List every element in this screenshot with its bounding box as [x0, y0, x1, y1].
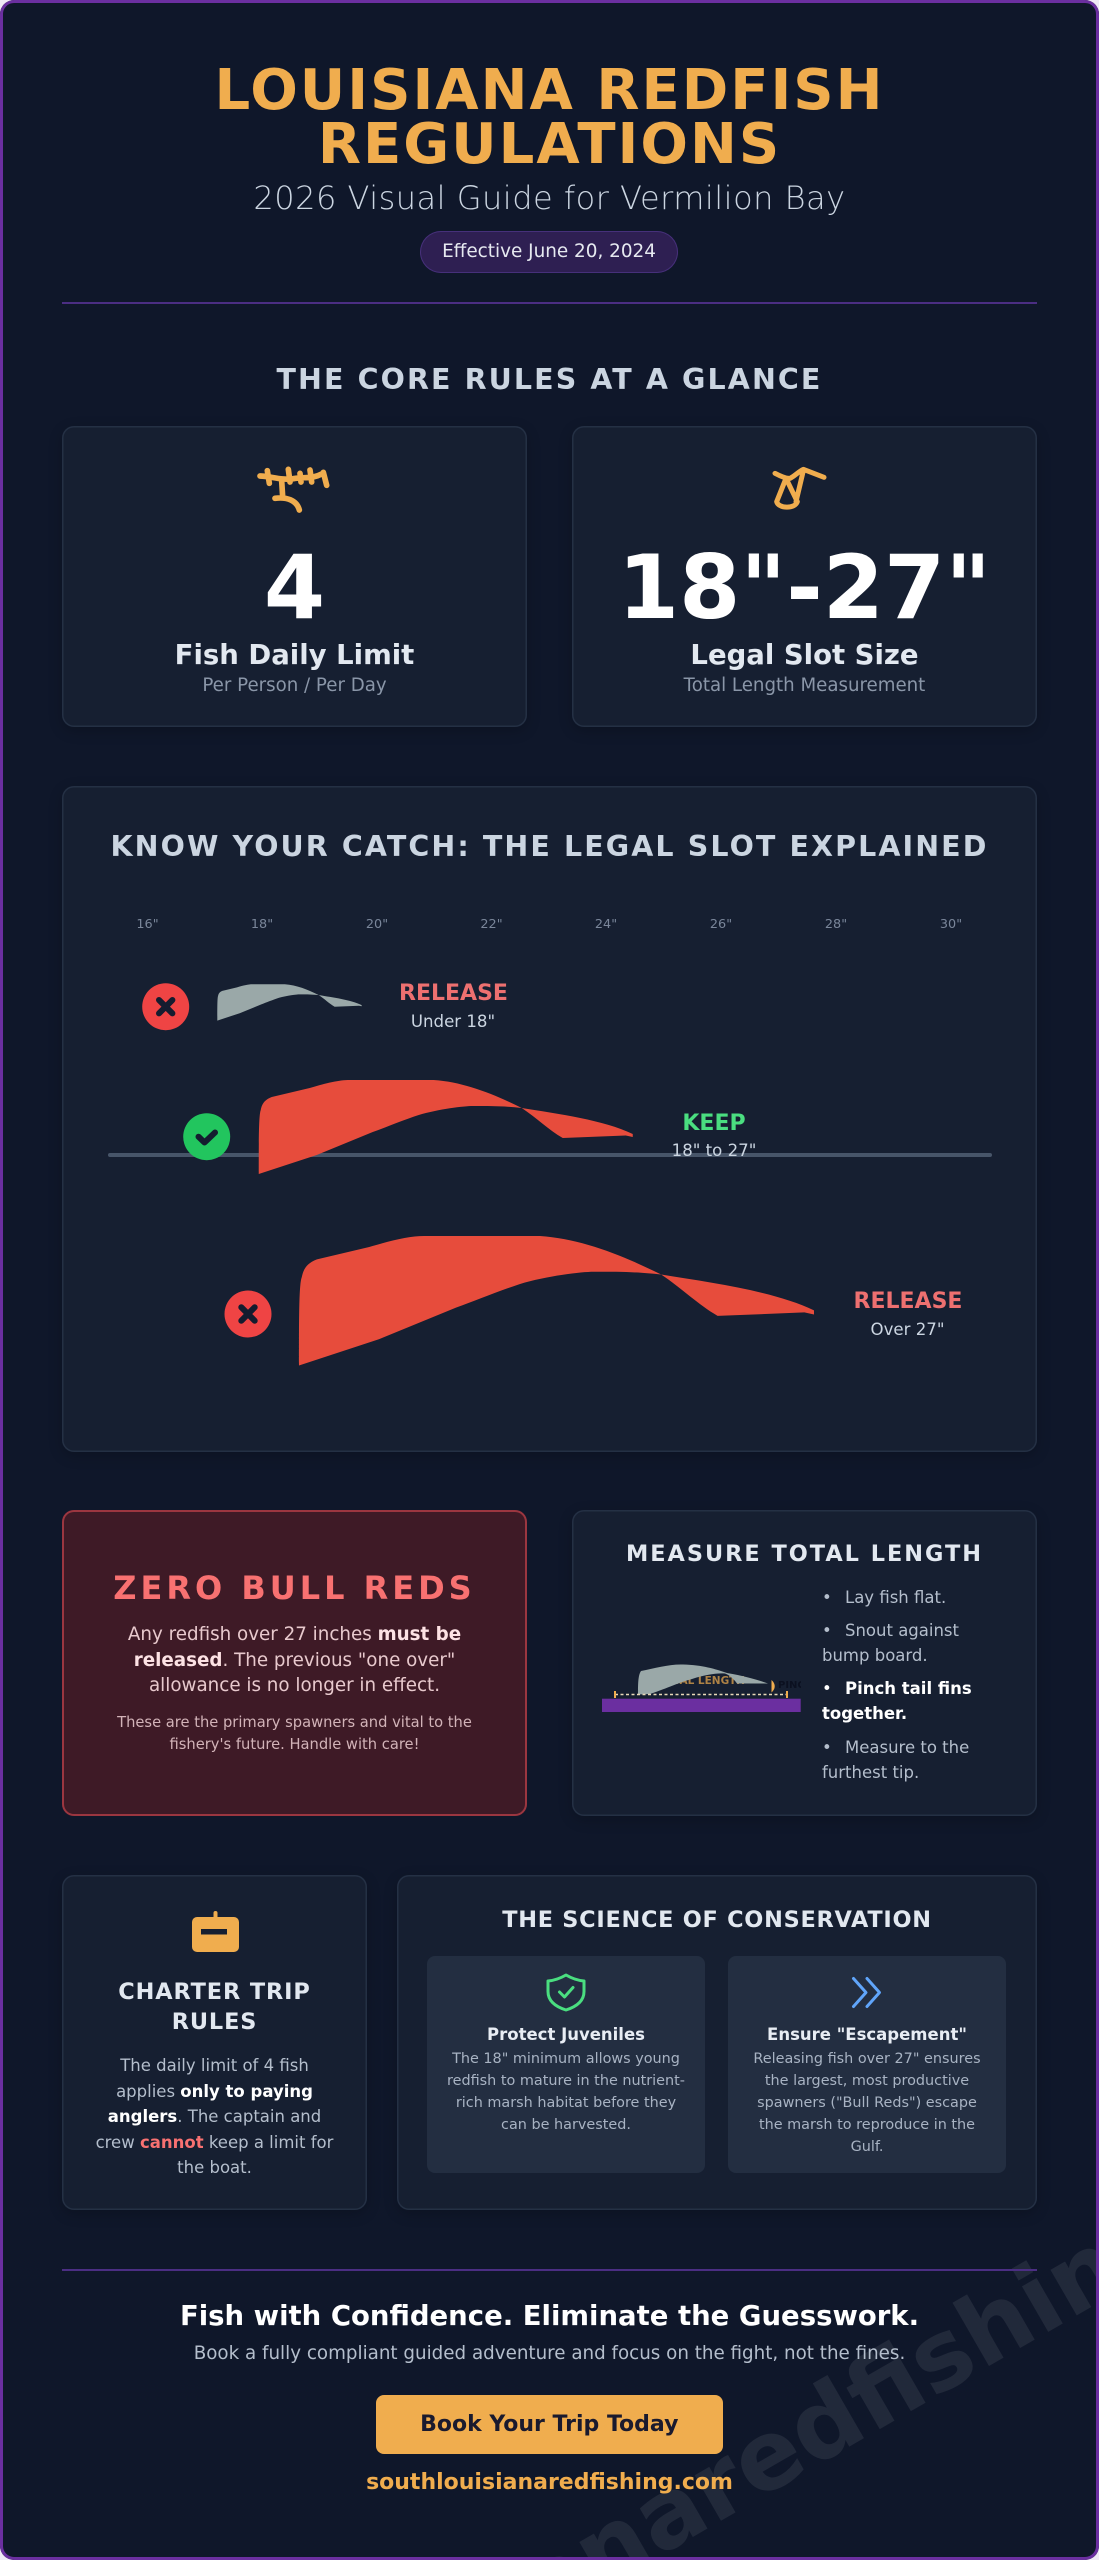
text: [753, 2051, 981, 2155]
measuring diagram: TOTAL LENGTH: [657, 1675, 745, 1687]
text: spawners ("Bull Reds") escape: [757, 2095, 977, 2111]
panel: fish daily limit: [62, 426, 527, 727]
fish and status icon: [142, 983, 362, 1030]
icon: shield check: [546, 1974, 586, 2012]
label: Legal Slot Size: [690, 639, 919, 671]
instruction list: •: [822, 1738, 832, 1757]
icon: chevrons: [852, 1976, 881, 2008]
heading: THE SCIENCE OF CONSERVATION: [502, 1907, 932, 1933]
ruler tick labels: 18": [251, 917, 273, 932]
instruction list: Pinch tail fins: [845, 1679, 972, 1698]
title: Ensure "Escapement": [767, 2025, 967, 2044]
title: [215, 58, 884, 177]
ruler tick labels: 20": [366, 917, 388, 932]
main text: Any redfish over 27 inches must be: [128, 1624, 461, 1645]
text: can be harvested.: [501, 2117, 631, 2133]
instruction list: •: [822, 1679, 832, 1698]
instruction list: Snout against: [845, 1621, 959, 1640]
instruction list: Lay fish flat.: [845, 1588, 946, 1607]
main text: allowance is no longer in effect.: [149, 1675, 440, 1696]
website link: southlouisianaredfishing.com: [366, 2470, 733, 2495]
body text: the boat.: [177, 2158, 252, 2177]
body text: crew cannot keep a limit for: [96, 2133, 333, 2152]
sub label: Total Length Measurement: [684, 674, 925, 696]
instruction list: •: [822, 1621, 832, 1640]
text: the marsh to reproduce in the: [759, 2117, 975, 2133]
small text: fishery's future. Handle with care!: [170, 1736, 419, 1753]
ruler tick labels: 26": [710, 917, 732, 932]
big number 4: 4: [264, 536, 325, 639]
section heading: core rules: THE CORE RULES AT A GLANCE: [277, 363, 822, 396]
heading: CHARTER TRIP: [118, 1979, 311, 2005]
main text: released. The previous "one over": [134, 1650, 455, 1671]
instruction list: together.: [822, 1704, 907, 1723]
small text: [117, 1714, 472, 1753]
icon: fish stringer: [257, 466, 330, 513]
body text: The daily limit of 4 fish: [120, 2056, 309, 2075]
sub label: Per Person / Per Day: [202, 674, 387, 696]
fish and status icon: [183, 1080, 633, 1174]
heading: ZERO BULL REDS: [113, 1569, 476, 1607]
body text: anglers. The captain and: [108, 2107, 321, 2126]
fish and status icon: [224, 1236, 814, 1366]
ruler tick labels: [136, 917, 962, 932]
icon: briefcase: [192, 1911, 239, 1952]
closing subtext: Book a fully compliant guided adventure and focus on the fight, not the fines.: [194, 2343, 905, 2364]
panel: science of conservation: [397, 1875, 1037, 2210]
small text: These are the primary spawners and vital to the: [117, 1714, 472, 1731]
small fish: release: [142, 980, 508, 1031]
instruction list: •: [822, 1588, 832, 1607]
measuring diagram: [602, 1664, 801, 1712]
ruler tick labels: 28": [825, 917, 847, 932]
instruction list: [822, 1588, 972, 1782]
instruction list: bump board.: [822, 1646, 928, 1665]
label over 27: Over 27": [871, 1320, 944, 1339]
text: The 18" minimum allows young: [452, 2051, 680, 2067]
panel: legal slot size: [572, 426, 1037, 727]
panel: zero bull reds: [62, 1510, 527, 1816]
text: [447, 2051, 685, 2133]
heading: RULES: [172, 2009, 257, 2035]
text: Releasing fish over 27" ensures: [753, 2051, 981, 2067]
label: Fish Daily Limit: [175, 639, 414, 671]
label keep: KEEP: [682, 1111, 746, 1136]
text: Gulf.: [851, 2139, 883, 2155]
instruction list: furthest tip.: [822, 1763, 919, 1782]
panel: know your catch: [62, 786, 1037, 1452]
body text: [96, 2056, 334, 2177]
heading: [118, 1979, 311, 2035]
title: REGULATIONS: [318, 112, 781, 177]
ruler tick labels: 24": [595, 917, 617, 932]
legal fish: keep: [183, 1080, 756, 1174]
panel: measure total length: [572, 1510, 1037, 1816]
ruler tick labels: 22": [480, 917, 503, 932]
instruction list: Measure to the: [845, 1738, 969, 1757]
title: Protect Juveniles: [487, 2025, 645, 2044]
label release: RELEASE: [399, 980, 508, 1006]
heading: MEASURE TOTAL LENGTH: [626, 1541, 983, 1567]
label 18 to 27: 18" to 27": [672, 1141, 756, 1160]
main text: [128, 1624, 461, 1696]
label release: RELEASE: [854, 1289, 962, 1314]
big number slot: 18"-27": [618, 536, 991, 639]
closing heading: Fish with Confidence. Eliminate the Guesswork.: [180, 2300, 919, 2332]
button: Book Your Trip Today: [420, 2412, 678, 2437]
effective date pill: Effective June 20, 2024: [442, 241, 656, 262]
card: ensure escapement: [728, 1956, 1006, 2173]
title: LOUISIANA REDFISH: [215, 58, 884, 123]
card: protect juveniles: [427, 1956, 705, 2173]
ruler tick labels: 16": [136, 917, 159, 932]
panel: charter trip rules: [62, 1875, 367, 2210]
subtitle: 2026 Visual Guide for Vermilion Bay: [253, 179, 846, 217]
oversize fish: release: [224, 1236, 962, 1366]
ruler tick labels: 30": [940, 917, 962, 932]
button: [376, 2395, 722, 2454]
heading: KNOW YOUR CATCH: THE LEGAL SLOT EXPLAINED: [110, 830, 988, 863]
effective date pill: [420, 231, 678, 273]
text: rich marsh habitat before they: [456, 2095, 676, 2111]
icon: ruler: [772, 466, 826, 510]
body text: applies only to paying: [116, 2082, 313, 2101]
text: redfish to mature in the nutrient-: [447, 2073, 685, 2089]
label under 18: Under 18": [411, 1012, 495, 1031]
text: the largest, most productive: [765, 2073, 969, 2089]
